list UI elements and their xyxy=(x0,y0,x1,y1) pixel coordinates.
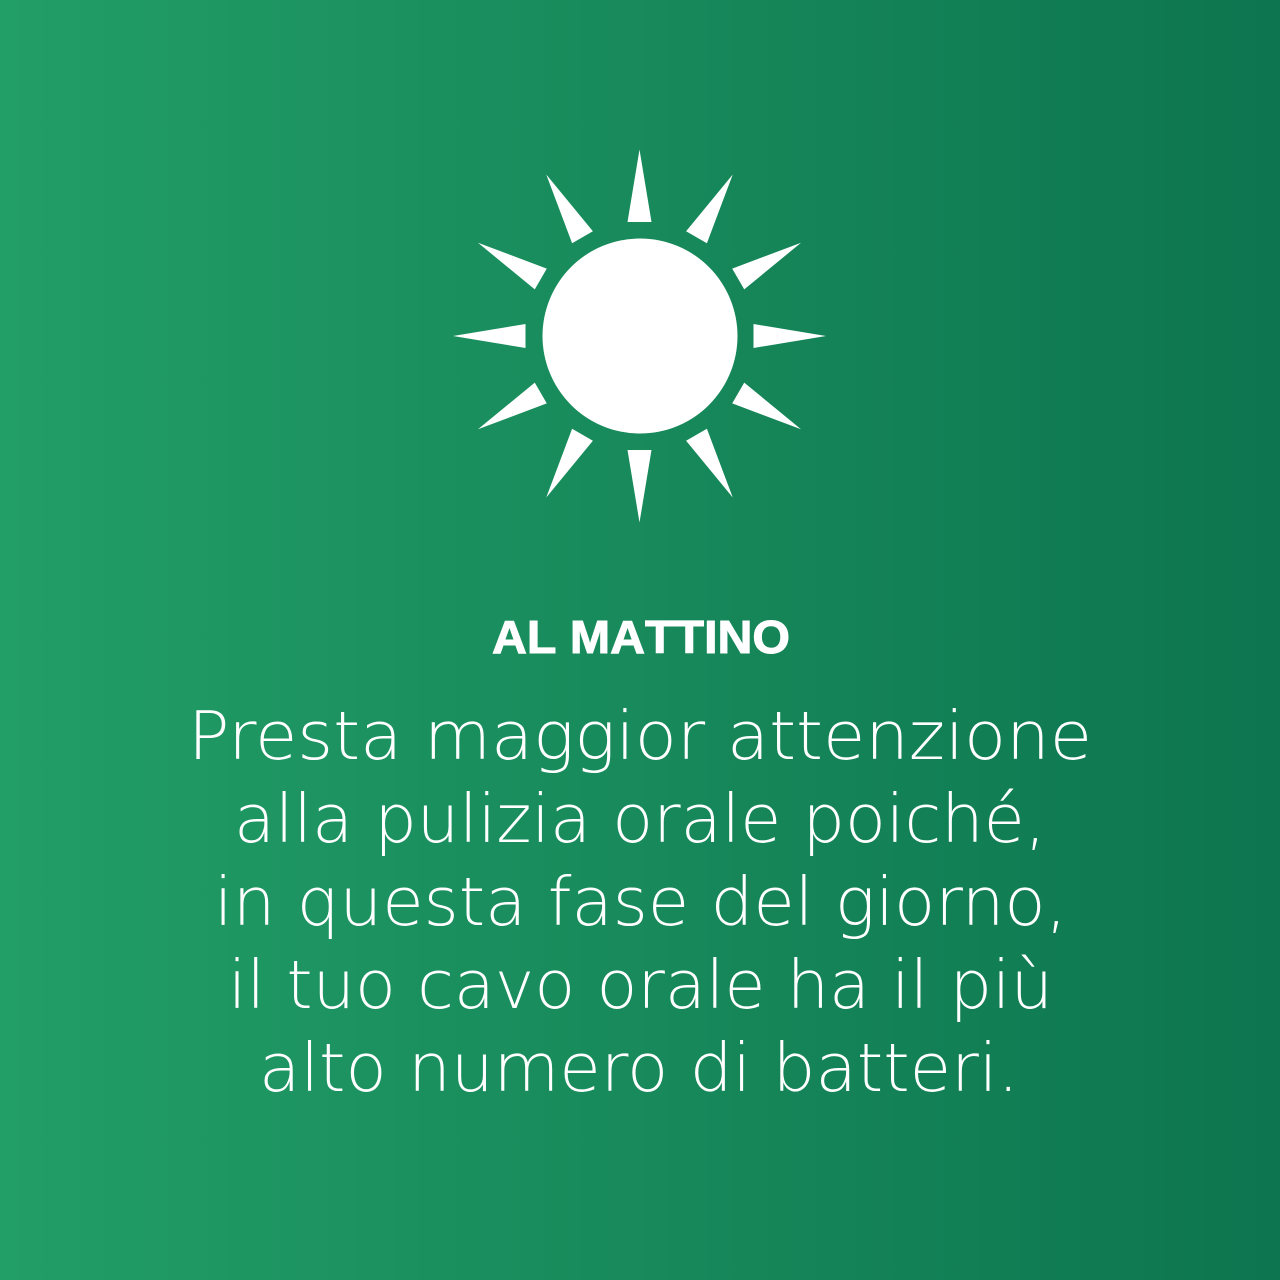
body text: in questa fase del giorno, xyxy=(214,863,1067,941)
body text: Presta maggior attenzione xyxy=(188,697,1092,775)
body text: alto numero di batteri. xyxy=(259,1029,1019,1107)
heading: AL MATTINO xyxy=(492,611,790,663)
body text: alla pulizia orale poiché, xyxy=(234,780,1046,858)
body text xyxy=(188,697,1092,1107)
icon: sun xyxy=(453,150,826,522)
body text: il tuo cavo orale ha il più xyxy=(228,946,1053,1024)
